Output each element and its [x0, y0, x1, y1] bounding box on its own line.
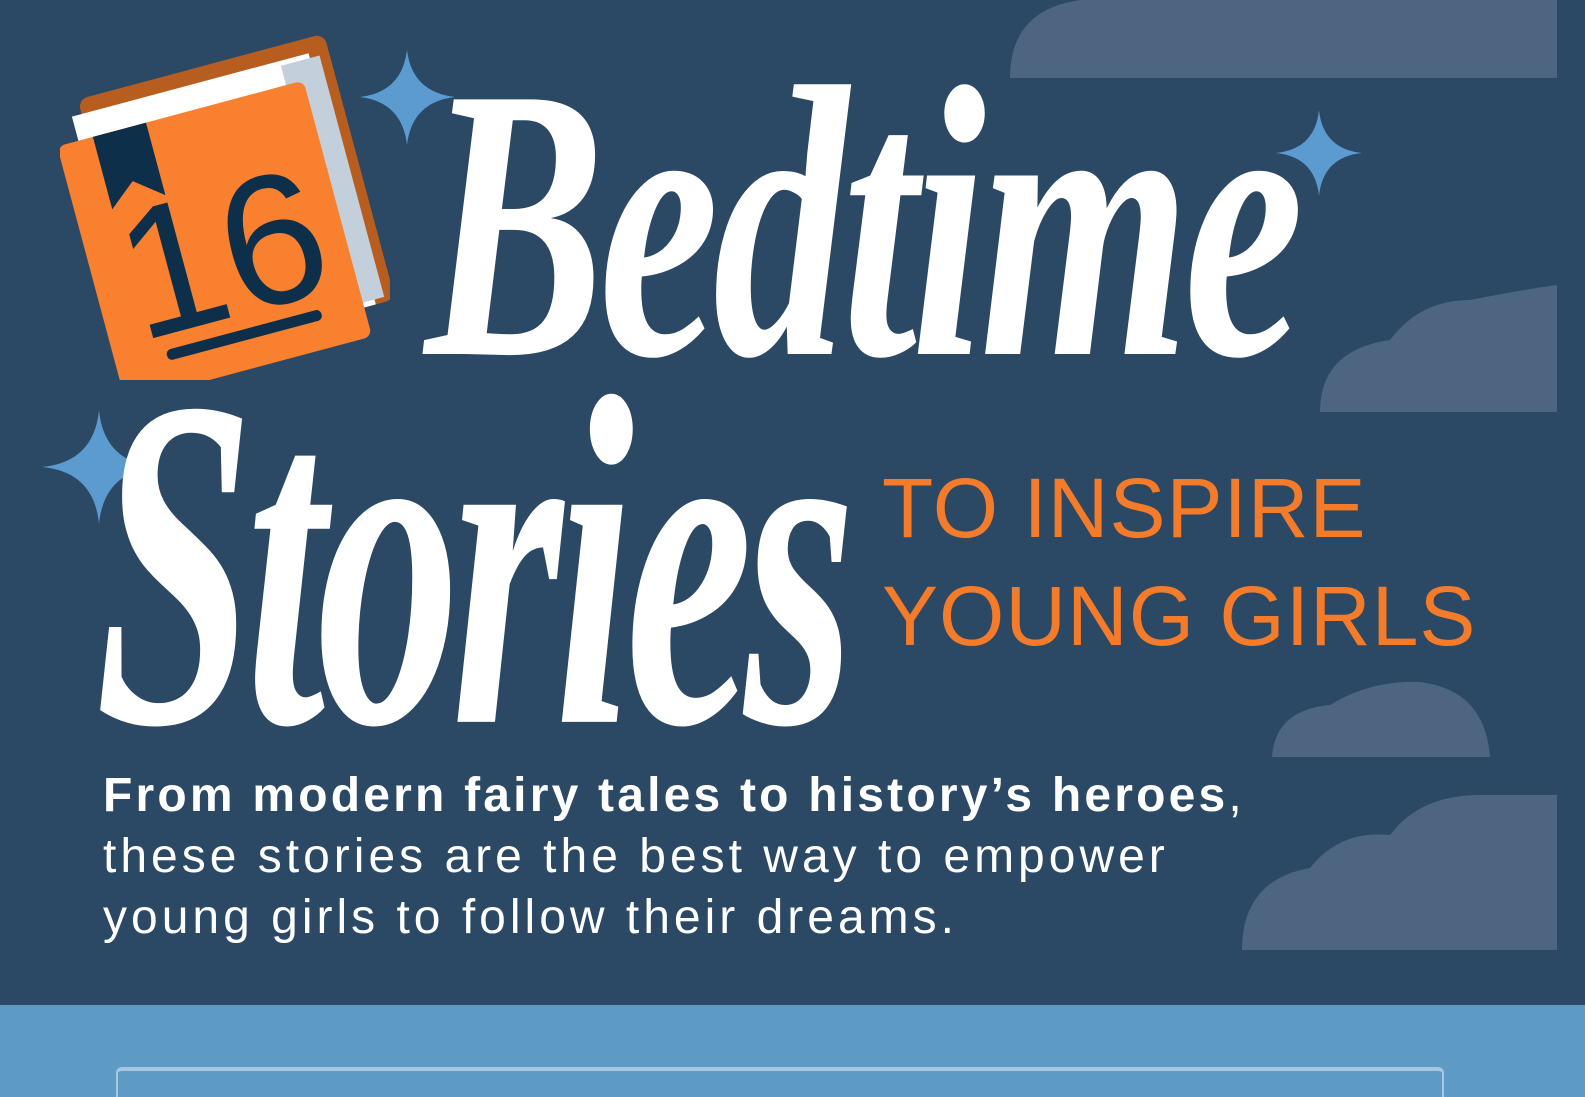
- subtitle: to inspire young girls: YOUNG GIRLS: [882, 569, 1476, 663]
- title: Stories: Stories: [95, 302, 847, 825]
- intro text: From modern fairy tales to history’s heroes,: [103, 769, 1246, 822]
- cloud: lower: [1272, 682, 1490, 757]
- cloud: right middle: [1320, 285, 1557, 412]
- light blue band: [0, 1005, 1585, 1097]
- subtitle: to inspire young girls: [882, 461, 1476, 663]
- star: top: [360, 50, 454, 145]
- subtitle: to inspire young girls: TO INSPIRE: [882, 461, 1367, 555]
- intro text: these stories are the best way to empower: [103, 830, 1169, 883]
- intro text: [103, 769, 1246, 944]
- star: right: [1276, 110, 1362, 196]
- cloud: bottom: [1242, 795, 1557, 950]
- content frame: [116, 1067, 1444, 1097]
- icon: orange book with 16: [60, 36, 390, 380]
- cloud: top: [1010, 0, 1557, 78]
- intro text: young girls to follow their dreams.: [103, 891, 958, 944]
- star: left: [42, 410, 127, 524]
- icon: orange book with 16: 16: [97, 128, 349, 380]
- title: Bedtime: Bedtime: [425, 8, 1298, 439]
